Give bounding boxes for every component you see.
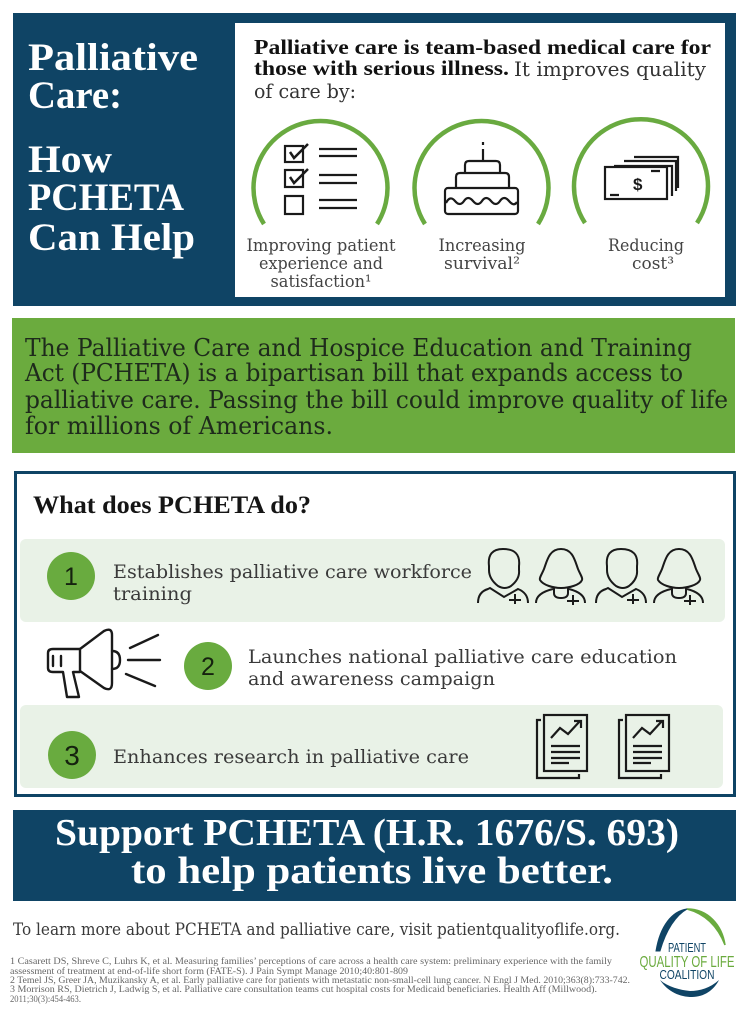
banner: Support PCHETA (H.R. 1676/S. 693): [55, 812, 679, 854]
icon: money: $: [633, 175, 643, 194]
references: 2 Temel JS, Greer JA, Muzikansky A, et al. Early palliative care for patients with metastatic non-small-cell lung cancer. N Engl J Med. 2010;363(8):733-742.: [10, 975, 630, 986]
logo: [640, 909, 734, 997]
title: PCHETA: [28, 176, 184, 219]
labels: Reducing: [608, 236, 684, 256]
row 1: [20, 539, 725, 622]
row 1: Establishes palliative care workforce: [113, 561, 472, 583]
row 1: 1: [64, 563, 78, 591]
row 3: 3: [64, 740, 80, 771]
intro text: [254, 35, 711, 103]
intro text: It improves quality: [514, 58, 706, 81]
title: [28, 36, 198, 259]
icon: reports: [537, 715, 669, 778]
icon: checklist: [285, 144, 357, 214]
learn more text: To learn more about PCHETA and palliative care, visit patientqualityoflife.org.: [13, 920, 620, 939]
row 2: [48, 630, 677, 697]
intro text: of care by:: [254, 80, 356, 103]
banner: [13, 810, 736, 901]
labels: satisfaction¹: [270, 272, 372, 292]
references: 1 Casarett DS, Shreve C, Luhrs K, et al. Measuring families’ perceptions of care across a health care system: preliminary experience with the family: [10, 956, 612, 967]
row 3: Enhances research in palliative care: [113, 746, 469, 768]
heading: What does PCHETA do?: [33, 492, 311, 519]
labels: cost³: [632, 254, 674, 274]
labels: [246, 236, 684, 292]
panel: summary: [12, 318, 735, 453]
panel: summary: Act (PCHETA) is a bipartisan bill that expands access to: [24, 359, 683, 387]
labels: Increasing: [438, 236, 526, 256]
icon: cake: [445, 142, 518, 214]
row 3: [20, 705, 723, 788]
title: Can Help: [28, 216, 195, 259]
labels: survival²: [444, 254, 520, 274]
title: How: [28, 138, 112, 181]
title: Palliative: [28, 36, 198, 79]
panel: summary: The Palliative Care and Hospice Education and Training: [25, 334, 692, 362]
panel: header: [13, 13, 736, 306]
panel: summary: for millions of Americans.: [25, 412, 333, 440]
row 1: training: [113, 583, 192, 605]
arc: patient experience: [253, 121, 388, 224]
intro text: Palliative care is team-based medical care for: [254, 35, 711, 59]
arc: survival: [414, 121, 548, 224]
labels: experience and: [259, 254, 383, 274]
references: assessment of treatment at end-of-life short form (FATE-S). J Pain Sympt Manage 2010;40:801-809: [10, 966, 408, 977]
icon: care team: [478, 549, 703, 605]
panel: summary: palliative care. Passing the bill could improve quality of life: [25, 386, 728, 414]
labels: Improving patient: [246, 236, 396, 256]
row 2: and awareness campaign: [248, 668, 495, 690]
title: Care:: [28, 74, 122, 117]
references: 2011;30(3):454-463.: [10, 994, 81, 1005]
icon: money: [605, 157, 678, 199]
references: [10, 956, 630, 1005]
banner: to help patients live better.: [131, 850, 613, 892]
panel: what does PCHETA do: [16, 472, 734, 796]
references: 3 Morrison RS, Dietrich J, Ladwig S, et al. Palliative care consultation teams cut hospital costs for Medicaid beneficiaries. Health Aff (Millwood).: [10, 984, 597, 995]
row 2: Launches national palliative care education: [248, 646, 677, 668]
arc: cost: [574, 119, 708, 223]
intro text: those with serious illness.: [254, 56, 509, 80]
logo: COALITION: [660, 967, 714, 982]
row 2: 2: [201, 653, 215, 681]
logo: PATIENT: [668, 940, 706, 955]
icon: megaphone: [48, 630, 160, 697]
